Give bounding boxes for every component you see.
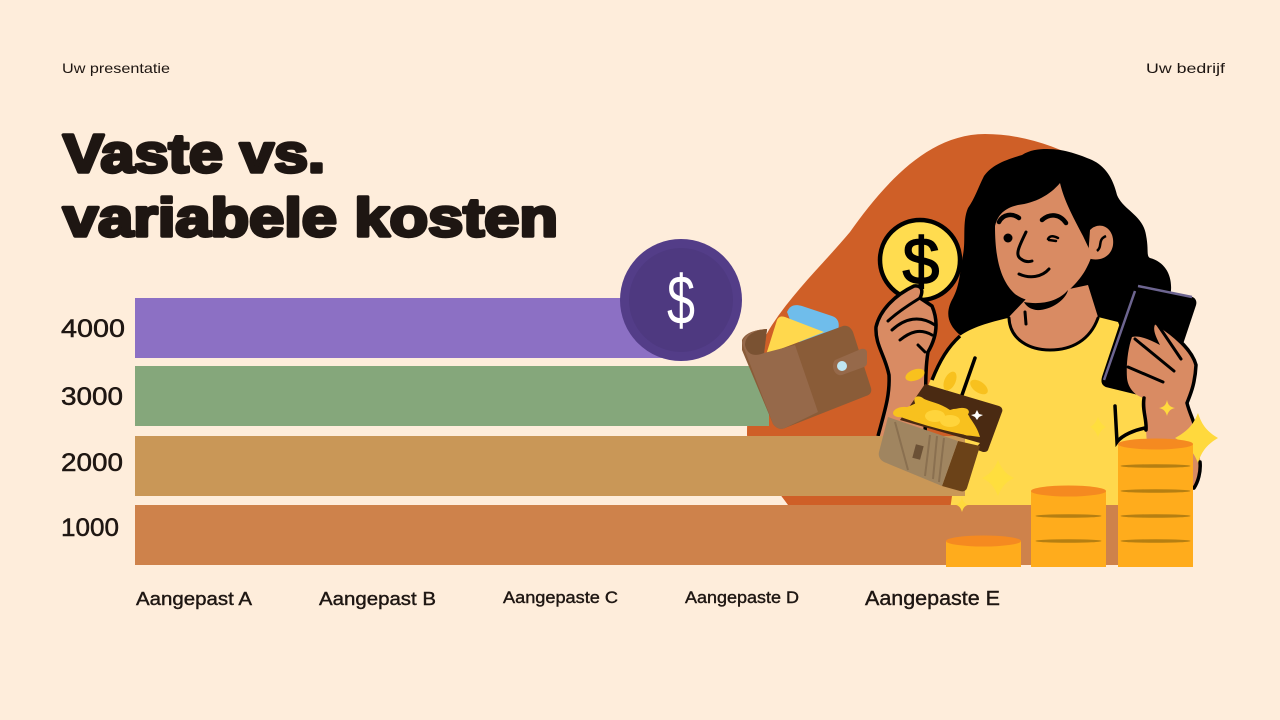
face: [995, 183, 1092, 301]
y axis labels: 2000: [61, 449, 123, 477]
chest side: [942, 441, 980, 491]
bar: 2000: [135, 436, 965, 496]
ear: [1088, 226, 1113, 259]
y axis labels: [61, 315, 125, 542]
y axis labels: 4000: [61, 315, 125, 343]
x axis labels: Aangepast B: [319, 589, 436, 609]
header: presentation label: Uw presentatie: [62, 60, 170, 76]
x axis labels: [136, 588, 1000, 610]
orange background blob: [747, 134, 1110, 520]
shoulder outline: [932, 336, 960, 380]
x axis labels: Aangepast A: [136, 589, 252, 609]
right eyebrow: [1042, 215, 1066, 223]
icon: treasure chest: [879, 366, 1002, 491]
right finger lines: [1128, 325, 1181, 382]
bar: 4000: [135, 298, 681, 358]
nose: [1018, 232, 1032, 262]
smile: [1019, 269, 1049, 277]
chest front: [879, 417, 958, 486]
flying coins: [904, 366, 990, 397]
gold coin: [880, 220, 960, 300]
x axis labels: Aangepaste E: [865, 588, 1000, 610]
icon: wallet: [742, 305, 871, 429]
icon: purple dollar circle: $: [667, 261, 695, 339]
chin shadow: [1024, 290, 1068, 310]
pile of gold coins: [892, 394, 980, 438]
phone: [1102, 286, 1195, 399]
right hand: [1127, 323, 1201, 490]
title: Vaste vs.: [63, 124, 325, 184]
x axis labels: Aangepaste C: [503, 588, 618, 607]
right hand outline: [1144, 323, 1200, 488]
header: company label: Uw bedrijf: [1146, 60, 1225, 76]
bar: 3000: [135, 366, 769, 426]
bar: 1000: [135, 505, 1120, 565]
chest planks: [895, 422, 944, 482]
body outlines: [962, 358, 1145, 442]
left arm outline: [876, 286, 936, 440]
hair: [948, 149, 1171, 345]
left arm and hand: [876, 286, 936, 440]
winking eye: [1048, 236, 1058, 241]
title: [63, 124, 558, 248]
phone edge: [1104, 286, 1192, 380]
gold coin: $: [903, 224, 939, 298]
coin stack: large: [1118, 438, 1193, 567]
y axis labels: 3000: [61, 383, 123, 411]
x axis labels: Aangepaste D: [685, 588, 799, 607]
white sparkle: [971, 410, 983, 420]
y axis labels: 1000: [61, 514, 119, 542]
neckline: [1009, 312, 1098, 350]
icon: purple dollar circle: [620, 239, 742, 361]
ear detail: [1097, 236, 1106, 251]
chest lock: [912, 444, 924, 460]
finger lines: [888, 298, 935, 352]
left eyebrow: [999, 215, 1019, 222]
chest lid: [900, 384, 1002, 452]
title: variabele kosten: [63, 188, 558, 248]
coin stack: medium: [1031, 486, 1106, 567]
illustration: woman: [876, 149, 1201, 510]
shirt: [925, 317, 1150, 510]
bar chart: [135, 298, 1120, 565]
neck: [1008, 285, 1098, 350]
open eye: [1004, 234, 1012, 242]
coin stack: small: [946, 536, 1021, 567]
sparkles: [956, 400, 1218, 512]
